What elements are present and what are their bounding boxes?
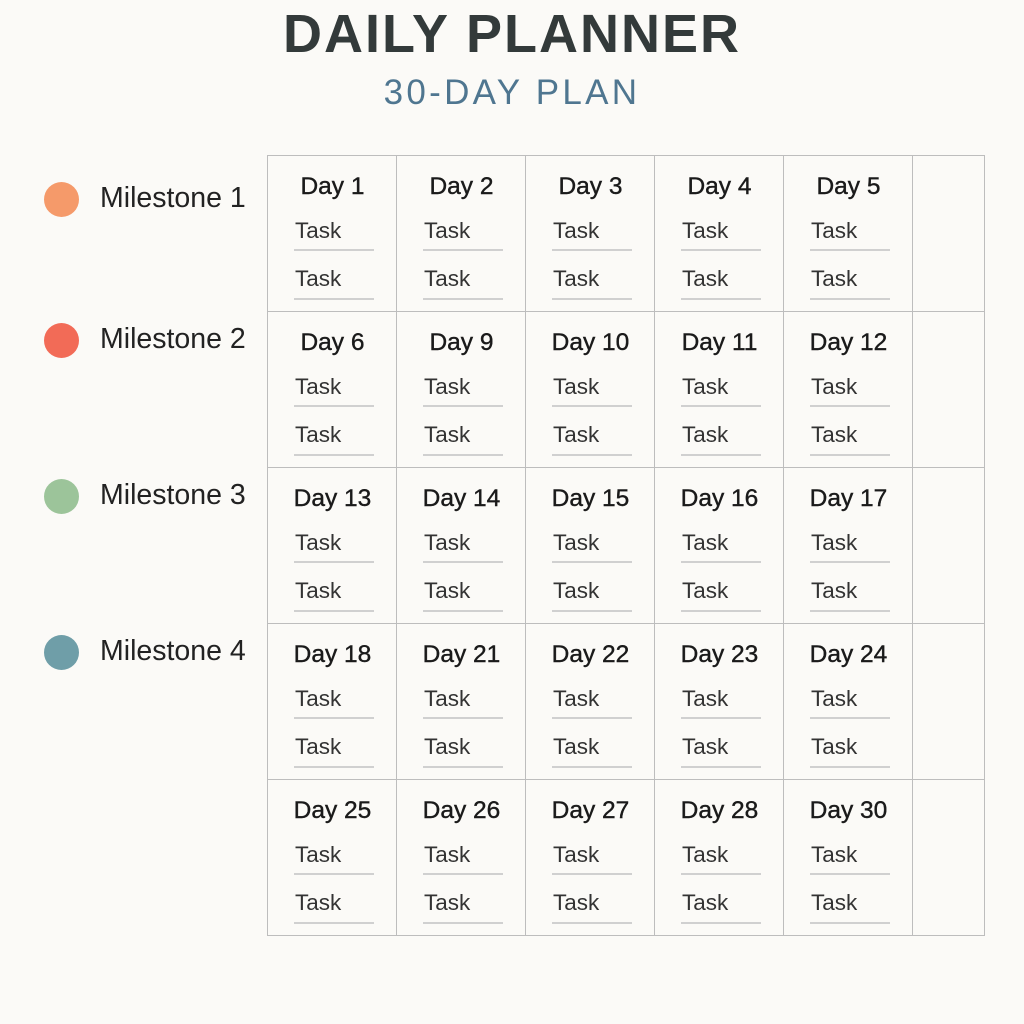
planner grid: Task <box>553 218 599 243</box>
planner grid: Task <box>682 890 728 915</box>
planner grid: Day 21 <box>423 641 500 668</box>
row 3: Task <box>295 530 341 555</box>
planner grid: Day 15 <box>552 485 629 512</box>
planner grid: Day 22 <box>552 641 629 668</box>
planner grid: Day 27 <box>552 797 629 824</box>
planner grid: Task <box>811 578 857 603</box>
planner grid: Task <box>424 266 470 291</box>
row 1: Task <box>295 218 341 243</box>
planner grid: Day 2 <box>429 173 494 200</box>
planner grid: Day 16 <box>681 485 758 512</box>
planner grid: Task <box>811 422 857 447</box>
row 4: Task <box>295 686 341 711</box>
row 3: Task <box>295 578 341 603</box>
planner grid: Task <box>682 374 728 399</box>
planner grid: Day 3 <box>558 173 622 200</box>
planner grid: Task <box>553 890 599 915</box>
planner grid: Day 23 <box>681 641 758 668</box>
row 3: Day 13 <box>294 485 371 512</box>
planner grid: Task <box>682 422 728 447</box>
planner grid: Task <box>424 530 470 555</box>
milestone 4 <box>44 635 246 670</box>
text: Milestone 1 <box>100 182 246 214</box>
row 2: Task <box>295 374 341 399</box>
row 2: Task <box>295 422 341 447</box>
planner grid: Day 11 <box>682 329 757 356</box>
text: Milestone 3 <box>100 479 246 511</box>
planner grid: Day 4 <box>687 173 752 200</box>
planner grid: Day 5 <box>816 173 880 200</box>
milestone 3 <box>44 479 246 514</box>
subtitle: 30-DAY PLAN <box>384 73 640 112</box>
planner grid: Day 24 <box>810 641 887 668</box>
planner grid: Task <box>553 842 599 867</box>
text: Milestone 2 <box>100 323 246 355</box>
milestone 2 <box>44 323 246 358</box>
planner grid: Task <box>811 842 857 867</box>
planner grid: Task <box>811 530 857 555</box>
planner grid: Task <box>553 686 599 711</box>
text: Milestone 4 <box>100 635 246 667</box>
row 5 <box>268 780 397 936</box>
row 1: Day 1 <box>300 173 364 200</box>
planner grid: Day 26 <box>423 797 500 824</box>
title: DAILY PLANNER <box>283 4 741 64</box>
row 1 <box>268 156 397 312</box>
row 3 <box>268 468 397 624</box>
planner grid: Task <box>811 218 857 243</box>
planner grid: Task <box>811 734 857 759</box>
row 2 <box>268 312 397 468</box>
planner grid: Task <box>424 842 470 867</box>
row 5: Task <box>295 842 341 867</box>
row 5: Day 25 <box>294 797 371 824</box>
planner grid: Task <box>811 686 857 711</box>
planner grid: Task <box>553 530 599 555</box>
row 4: Task <box>295 734 341 759</box>
planner grid: Task <box>553 734 599 759</box>
planner grid: Task <box>424 890 470 915</box>
planner grid: Task <box>811 374 857 399</box>
planner grid: Task <box>424 686 470 711</box>
planner grid: Task <box>682 530 728 555</box>
planner grid: Task <box>811 890 857 915</box>
planner grid: Day 9 <box>429 329 494 356</box>
planner grid: Task <box>424 734 470 759</box>
planner grid: Task <box>682 218 728 243</box>
planner grid: Task <box>682 686 728 711</box>
planner grid: Task <box>682 578 728 603</box>
planner grid: Day 30 <box>810 797 887 824</box>
row 4 <box>268 624 397 780</box>
planner grid: Task <box>553 422 599 447</box>
row 4: Day 18 <box>294 641 371 668</box>
planner grid: Task <box>553 266 599 291</box>
planner grid: Day 10 <box>552 329 629 356</box>
row 1: Task <box>295 266 341 291</box>
planner grid: Day 28 <box>681 797 758 824</box>
planner grid: Task <box>682 266 728 291</box>
planner grid: Task <box>424 218 470 243</box>
planner grid: Task <box>424 422 470 447</box>
planner grid: Day 12 <box>810 329 887 356</box>
planner grid: Task <box>424 578 470 603</box>
planner grid: Day 17 <box>810 485 887 512</box>
row 5: Task <box>295 890 341 915</box>
planner grid: Task <box>811 266 857 291</box>
planner grid: Day 14 <box>423 485 500 512</box>
milestone 1 <box>44 182 246 217</box>
planner grid <box>267 155 985 936</box>
planner grid: Task <box>553 578 599 603</box>
planner grid: Task <box>682 734 728 759</box>
row 2: Day 6 <box>300 329 364 356</box>
planner grid: Task <box>424 374 470 399</box>
planner grid: Task <box>553 374 599 399</box>
planner grid: Task <box>682 842 728 867</box>
